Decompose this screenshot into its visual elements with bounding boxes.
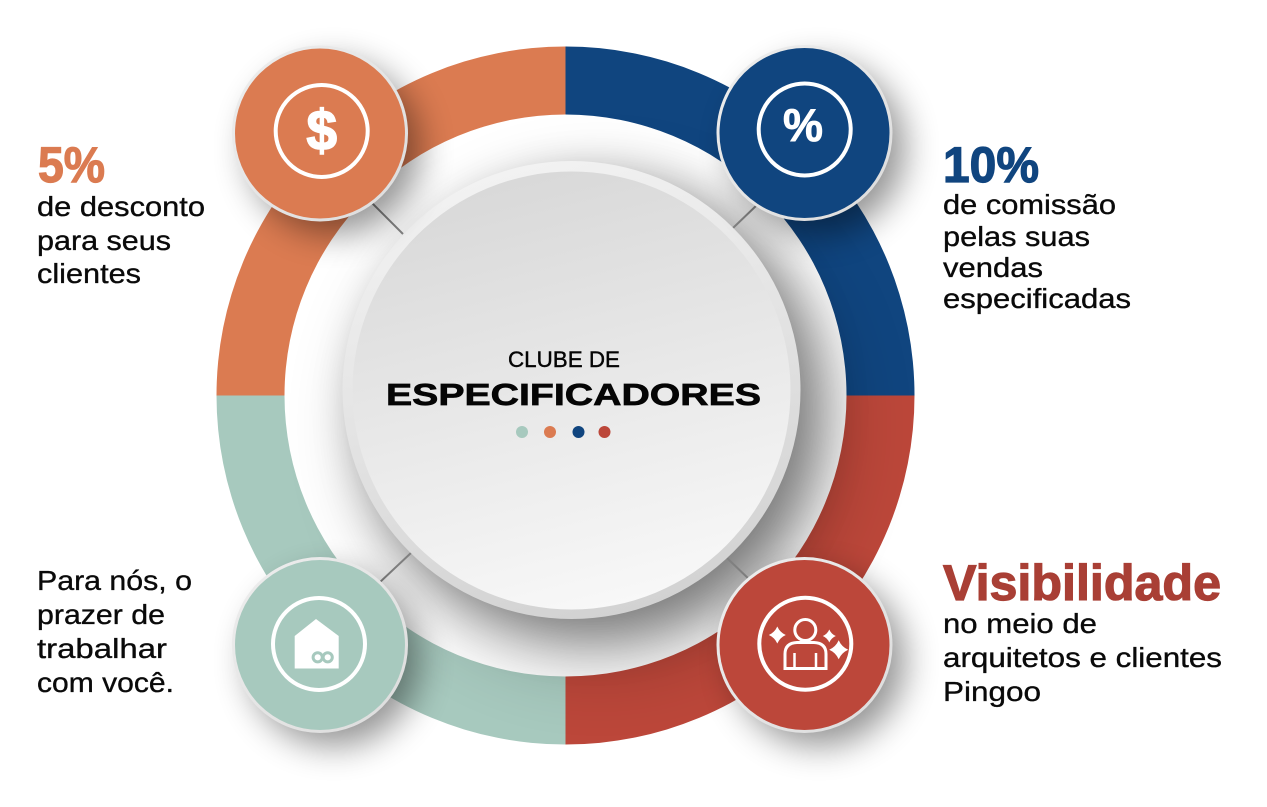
connector lines bbox=[370, 201, 758, 584]
ring segment: green bbox=[216, 396, 566, 744]
text block: 10% comissão: de comissão bbox=[943, 189, 1116, 220]
text block: 5% desconto: clientes bbox=[37, 258, 141, 289]
title: especificadores: ESPECIFICADORES bbox=[386, 377, 761, 412]
text block: para nós: com você. bbox=[37, 667, 174, 698]
badge: red person icon bbox=[716, 557, 892, 733]
centre disc bbox=[342, 161, 800, 619]
heading: 5%: 5% bbox=[38, 137, 105, 193]
badge: blue percent icon bbox=[716, 45, 892, 221]
ring segment: red bbox=[566, 396, 914, 744]
badge: orange dollar icon bbox=[232, 46, 408, 222]
text block: para nós bbox=[37, 565, 192, 698]
text block: visibilidade bbox=[943, 555, 1222, 707]
heading: 10%: 10% bbox=[943, 137, 1039, 193]
text block: visibilidade: arquitetos e clientes bbox=[943, 642, 1222, 673]
text block: 10% comissão: especificadas bbox=[943, 283, 1131, 314]
ring: four coloured segments bbox=[216, 46, 914, 744]
text block: para nós: prazer de bbox=[37, 599, 165, 630]
ring segment: blue bbox=[566, 46, 914, 396]
badge: green house icon bbox=[232, 557, 408, 733]
text block: 10% comissão bbox=[943, 137, 1131, 314]
colour dots bbox=[516, 426, 610, 438]
ring segment: orange bbox=[216, 46, 566, 396]
text block: para nós: trabalhar bbox=[37, 633, 167, 664]
text block: 5% desconto: para seus bbox=[37, 225, 171, 256]
centre disc shadow bbox=[360, 179, 840, 665]
text block: para nós: Para nós, o bbox=[37, 565, 192, 596]
badge: orange dollar icon: $ bbox=[306, 99, 337, 163]
title: clube de: CLUBE DE bbox=[508, 347, 620, 372]
text block: 10% comissão: pelas suas bbox=[943, 221, 1090, 252]
text block: visibilidade: Pingoo bbox=[943, 676, 1041, 707]
text block: visibilidade: no meio de bbox=[943, 608, 1097, 639]
text block: 5% desconto bbox=[37, 137, 205, 289]
text block: 5% desconto: de desconto bbox=[37, 191, 205, 222]
heading: visibilidade: Visibilidade bbox=[943, 555, 1221, 611]
badge shadows bbox=[248, 62, 905, 746]
percent glyph: % bbox=[783, 99, 823, 151]
text block: 10% comissão: vendas bbox=[943, 252, 1043, 283]
